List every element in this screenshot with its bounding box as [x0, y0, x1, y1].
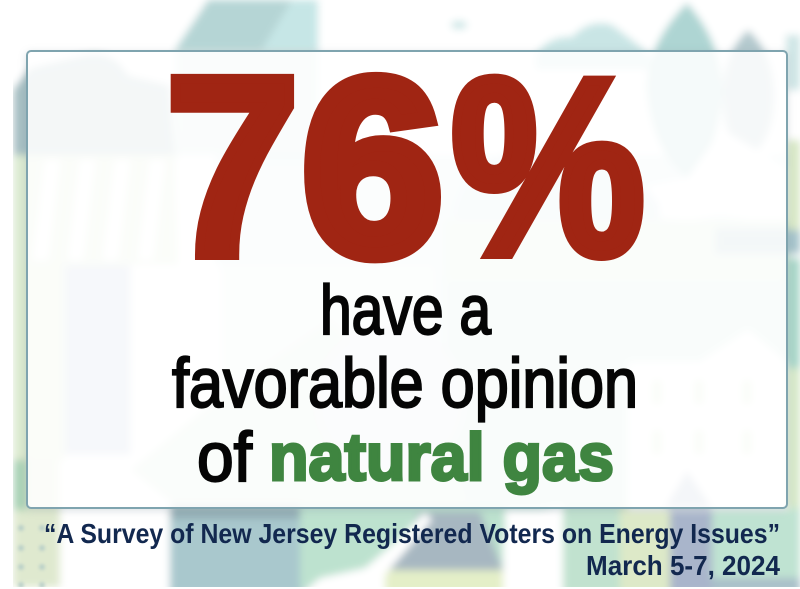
top-left roof [175, 0, 292, 50]
dots pattern lower left [18, 525, 45, 588]
text: of natural gas: natural gas [269, 420, 614, 495]
panel: translucent white card [26, 50, 788, 509]
top right trees and clouds [535, 20, 648, 50]
text: favorable opinion: favorable opinion [172, 344, 638, 422]
left house [13, 54, 175, 155]
text: of natural gas: of [197, 418, 253, 496]
source: survey date: March 5-7, 2024 [586, 550, 780, 581]
text: have a: have a [320, 271, 491, 349]
headline: 76%: 6 [303, 28, 442, 306]
headline: 76% [165, 24, 645, 310]
large pale ground tones [215, 155, 785, 455]
bottom blocks [166, 514, 308, 587]
right house in panel [628, 330, 790, 510]
headline: 76%: 7 [165, 24, 300, 310]
headline: 76%: % [451, 27, 645, 308]
